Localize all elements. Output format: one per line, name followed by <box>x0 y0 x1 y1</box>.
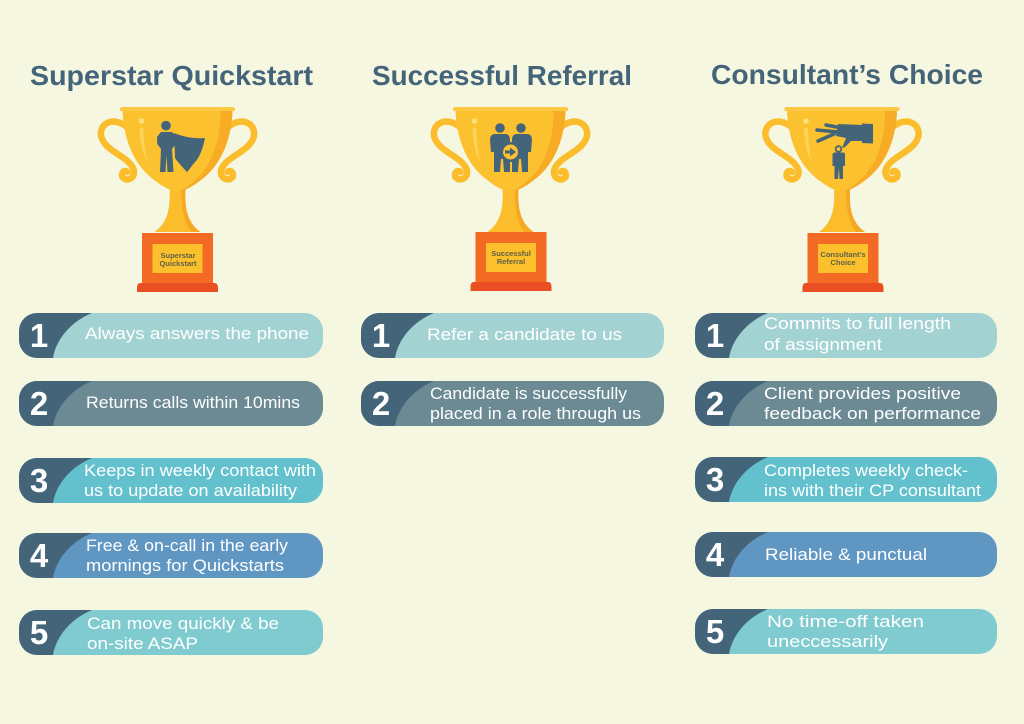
item 4: Free and on-call <box>19 533 323 578</box>
heading: Consultant's Choice: Consultant’s Choice <box>711 59 983 90</box>
item 5: Can move quickly: 5 <box>30 614 48 651</box>
plaque text: Superstar <box>160 251 196 260</box>
heading: Superstar Quickstart: Superstar Quickstart <box>30 60 313 91</box>
column 1 list <box>19 313 323 655</box>
item 4: Reliable and punctual: 4 <box>706 536 725 573</box>
item 2: Client feedback: feedback on performance <box>764 404 981 423</box>
item 5: Can move quickly <box>19 610 323 655</box>
item 2: Returns calls within 10mins: 2 <box>30 385 48 422</box>
plaque text <box>820 250 866 267</box>
item 4: Reliable and punctual: Reliable & punctual <box>765 545 927 564</box>
icon: hand picking a person <box>817 124 873 179</box>
item 2: Returns calls within 10mins: Returns calls within 10mins <box>86 393 300 412</box>
plaque text <box>491 249 531 266</box>
item 4: Free and on-call: Free & on-call in the early <box>86 536 289 555</box>
item 5: No time-off: No time-off taken <box>767 612 924 631</box>
item 2: Candidate placed: 2 <box>372 385 390 422</box>
item 4: Free and on-call: 4 <box>30 537 49 574</box>
plaque text: Choice <box>830 258 856 267</box>
item 5: Can move quickly: Can move quickly & be <box>87 614 279 633</box>
item 1: Commits to full length: 1 <box>706 317 724 354</box>
item 2: Client feedback <box>695 381 997 426</box>
item 3: Keeps in weekly contact: 3 <box>30 462 48 499</box>
item 2: Client feedback: Client provides positive <box>764 384 961 403</box>
column 3 list <box>695 313 997 654</box>
icon: two people and arrow <box>490 123 532 172</box>
item 1: Commits to full length: of assignment <box>764 335 882 354</box>
item 1: Always answers the phone: Always answers the phone <box>85 324 309 343</box>
trophy: Superstar Quickstart <box>101 107 254 292</box>
plaque text: Successful <box>491 249 531 258</box>
plaque text: Referral <box>497 257 525 266</box>
plaque text <box>159 251 197 268</box>
item 1: Refer a candidate: Refer a candidate to us <box>427 325 622 344</box>
plaque text: Quickstart <box>159 259 197 268</box>
heading: Successful Referral: Successful Referral <box>372 60 632 91</box>
trophy: Successful Referral <box>434 107 587 291</box>
item 1: Refer a candidate: 1 <box>372 317 390 354</box>
item 2: Returns calls within 10mins <box>19 381 323 426</box>
item 3: Weekly check-ins: Completes weekly check- <box>764 461 968 480</box>
icon: superhero with cape <box>157 121 205 172</box>
trophy: Consultant's Choice <box>765 107 919 292</box>
item 5: No time-off <box>695 609 997 654</box>
item 3: Weekly check-ins: ins with their CP consultant <box>764 481 981 500</box>
item 1: Commits to full length <box>695 313 997 358</box>
item 2: Candidate placed: placed in a role through us <box>430 404 641 423</box>
plaque text: Consultant’s <box>820 250 866 259</box>
item 1: Refer a candidate <box>361 313 664 358</box>
item 3: Keeps in weekly contact <box>19 458 323 503</box>
item 3: Keeps in weekly contact: us to update on availability <box>84 481 298 500</box>
column 2 list <box>361 313 664 426</box>
item 4: Reliable and punctual <box>695 532 997 577</box>
item 2: Candidate placed: Candidate is successfully <box>430 384 628 403</box>
item 3: Weekly check-ins: 3 <box>706 461 724 498</box>
item 4: Free and on-call: mornings for Quickstarts <box>86 556 284 575</box>
item 5: No time-off: 5 <box>706 613 724 650</box>
item 5: Can move quickly: on-site ASAP <box>87 634 198 653</box>
item 1: Always answers the phone <box>19 313 323 358</box>
item 2: Client feedback: 2 <box>706 385 724 422</box>
item 3: Weekly check-ins <box>695 457 997 502</box>
item 1: Always answers the phone: 1 <box>30 317 48 354</box>
item 5: No time-off: uneccessarily <box>767 632 889 651</box>
item 3: Keeps in weekly contact: Keeps in weekly contact with <box>84 461 316 480</box>
item 2: Candidate placed <box>361 381 664 426</box>
item 1: Commits to full length: Commits to full length <box>764 314 951 333</box>
